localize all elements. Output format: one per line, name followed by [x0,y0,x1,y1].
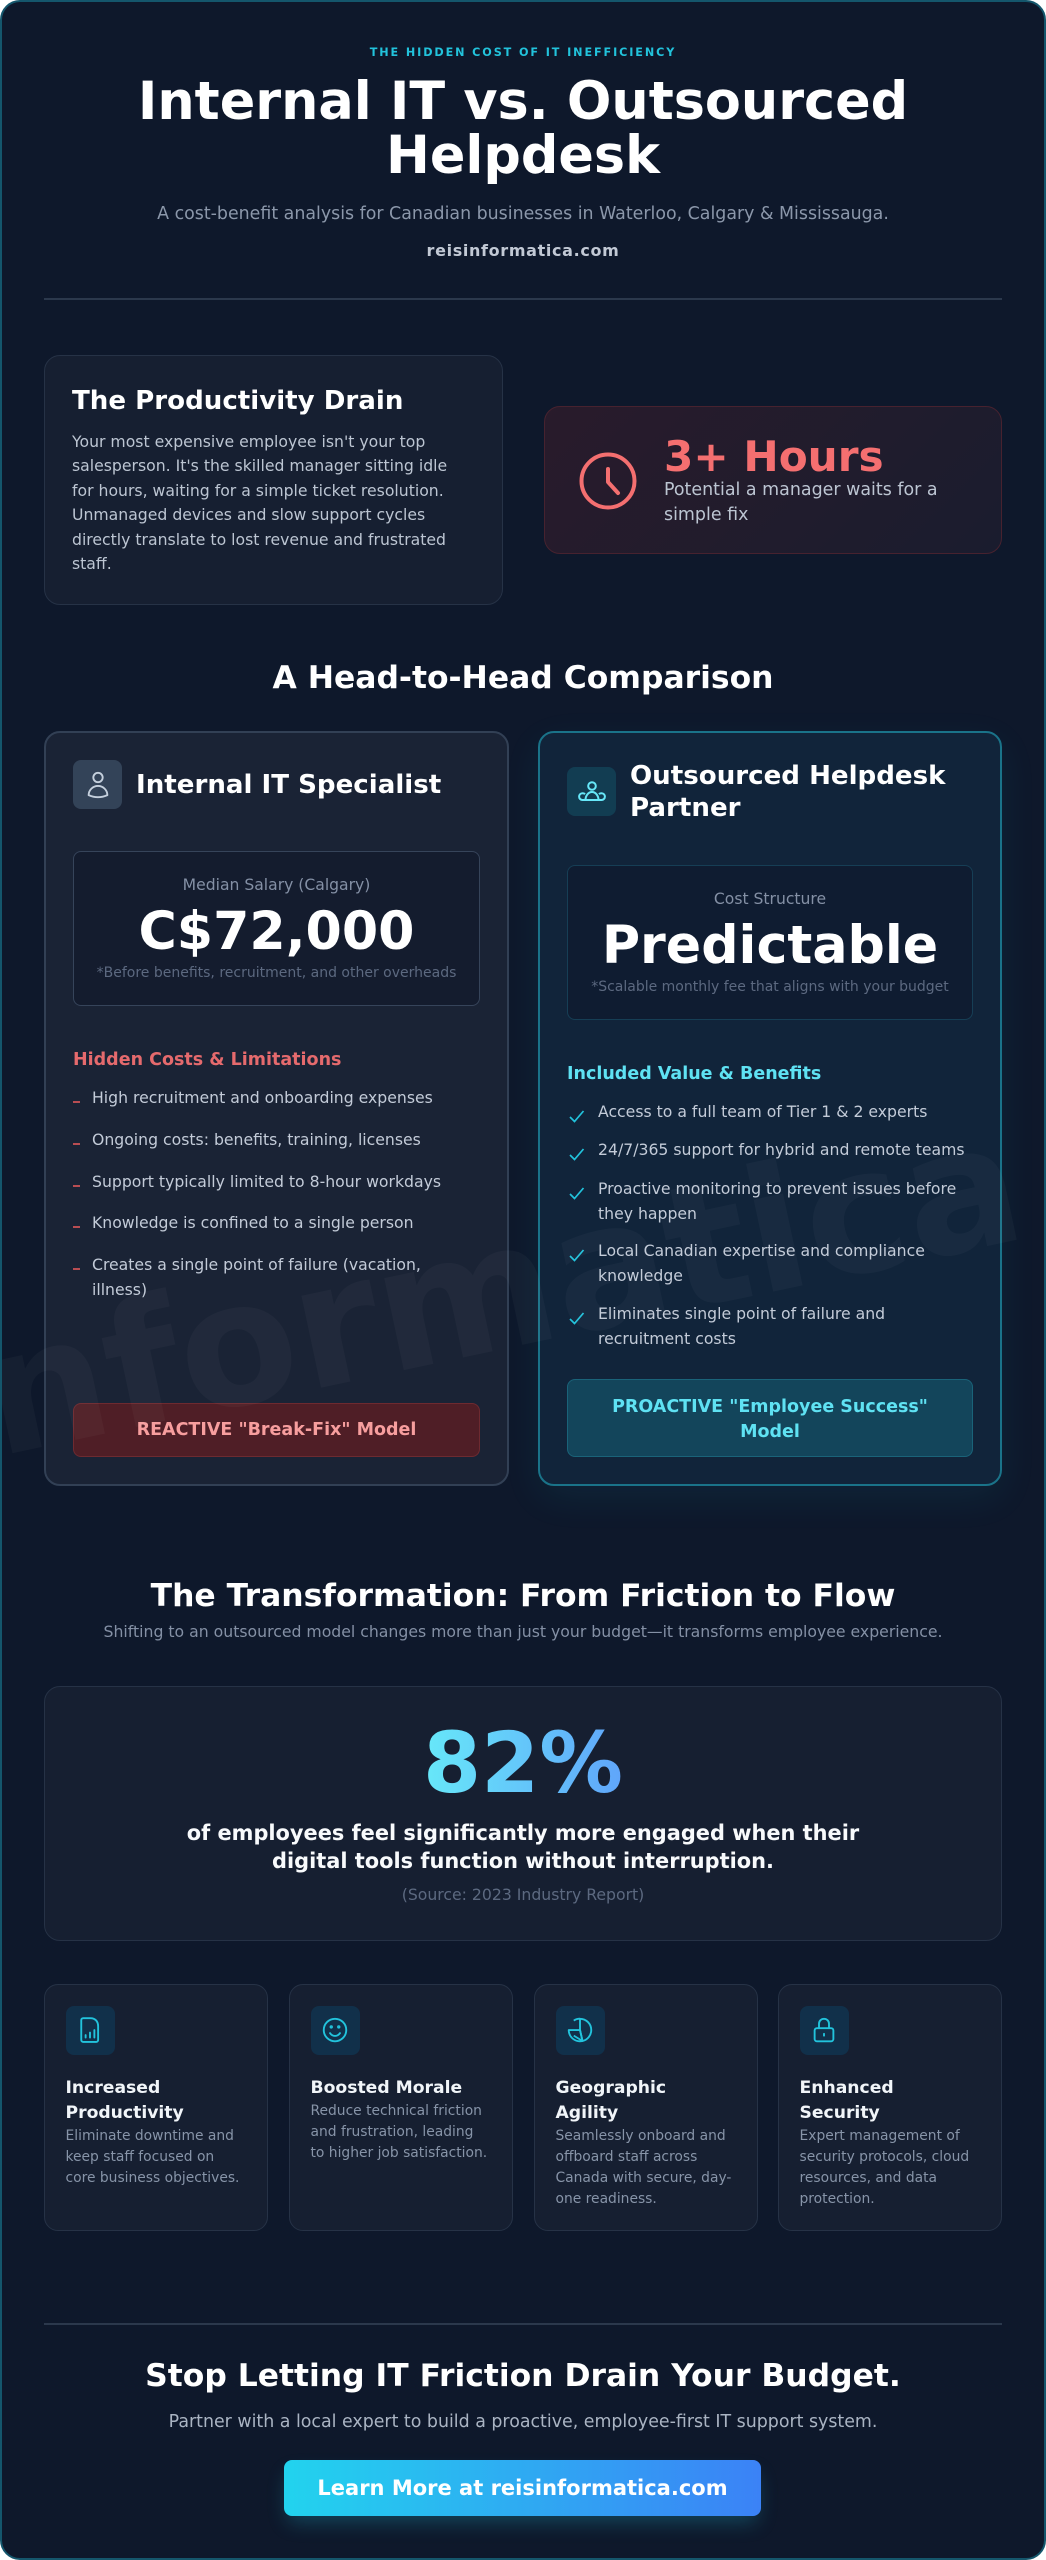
card title: Partner [630,793,741,823]
card text: Reduce technical friction [310,2103,482,2119]
card text: security protocols, cloud [800,2149,969,2165]
card text: one readiness. [556,2191,657,2207]
list: hidden costs: Ongoing costs: benefits, training, licenses [92,1130,421,1149]
panel: 82% stat [44,1686,1002,1941]
salary value: C$72,000 [138,902,414,962]
badge: proactive: PROACTIVE "Employee Success" [612,1397,928,1417]
card text [310,2103,487,2161]
title: Helpdesk [386,124,660,186]
body text: Your most expensive employee isn't your top [72,432,425,451]
card text: resources, and data [800,2170,937,2186]
section heading: transformation: The Transformation: From Friction to Flow [151,1578,895,1614]
list heading: Included Value & Benefits [567,1064,821,1084]
card title [800,2078,894,2122]
card title: Boosted Morale [310,2078,462,2098]
list: benefits [570,1102,965,1348]
cta button: Learn More at reisinformatica.com [317,2476,728,2500]
badge: proactive: Model [740,1422,800,1442]
stat statement: of employees feel significantly more engaged when their [187,1821,859,1845]
icon: globe segments [556,2006,604,2054]
panel: internal IT specialist [44,731,509,1486]
card title: Productivity [66,2102,184,2122]
stat caption: Potential a manager waits for a [664,480,938,500]
card text [66,2128,239,2186]
list: hidden costs: Support typically limited to 8-hour workdays [92,1172,441,1191]
card title [630,761,946,823]
panel: outsourced helpdesk partner [538,731,1002,1486]
body text [72,432,447,573]
card text: Eliminate downtime and [66,2128,234,2144]
card title: Security [800,2102,880,2122]
icon: document chart [66,2006,114,2054]
card title: Outsourced Helpdesk [630,761,945,791]
salary box [73,851,480,1006]
badge: reactive [73,1403,480,1457]
panel: geographic agility [534,1984,758,2231]
badge: reactive: REACTIVE "Break-Fix" Model [137,1420,416,1440]
website: reisinformatica.com [427,241,619,260]
subtitle: A cost-benefit analysis for Canadian businesses in Waterloo, Calgary & Mississauga. [157,204,889,224]
body text: Unmanaged devices and slow support cycles [72,505,425,524]
card text [800,2128,969,2207]
list: benefits: knowledge [598,1266,683,1284]
salary label: Median Salary (Calgary) [183,876,370,894]
panel: 3+ hours stat [544,406,1002,554]
list: benefits: Eliminates single point of failure and [598,1304,885,1323]
panel: boosted morale [289,1984,513,2231]
list: hidden costs: High recruitment and onboarding expenses [92,1088,433,1107]
card text: keep staff focused on [66,2149,214,2165]
source: (Source: 2023 Industry Report) [402,1885,644,1904]
cost note: *Scalable monthly fee that aligns with your budget [591,979,949,995]
card text: Seamlessly onboard and [556,2128,726,2144]
card title [66,2078,184,2122]
icon: team [567,767,616,816]
card title: Geographic [556,2078,666,2098]
icon: smile [310,2006,360,2054]
stat value: 82% [423,1714,623,1812]
panel: enhanced security [778,1984,1002,2231]
card title: Increased [66,2078,160,2098]
panel: productivity drain [44,355,503,605]
body text: salesperson. It's the skilled manager sitting idle [72,456,447,475]
list: benefits: Access to a full team of Tier 1 & 2 experts [598,1102,927,1121]
section subheading: Shifting to an outsourced model changes more than just your budget—it transforms employee experience. [104,1622,942,1641]
card text: and frustration, leading [310,2124,473,2140]
list heading: Hidden Costs & Limitations [73,1050,341,1070]
icon: person [73,760,122,809]
list: benefits: recruitment costs [598,1328,736,1348]
body text: for hours, waiting for a simple ticket resolution. [72,481,444,500]
cost value: Predictable [602,916,938,976]
card text: Canada with secure, day- [556,2170,731,2186]
card text: Expert management of [800,2128,960,2144]
icon: lock [800,2006,848,2054]
stat statement [187,1821,860,1873]
section heading: comparison: A Head-to-Head Comparison [272,660,774,696]
list: hidden costs: Knowledge is confined to a single person [92,1213,414,1232]
list: benefits: Proactive monitoring to prevent issues before [598,1179,956,1198]
cost label: Cost Structure [714,890,826,908]
card title: Internal IT Specialist [136,770,441,800]
card title: Agility [556,2102,618,2122]
list: hidden costs: Creates a single point of failure (vacation, [92,1255,421,1274]
footer call to action [145,2358,901,2531]
stat caption: simple fix [664,504,748,524]
heading: The Productivity Drain [72,386,403,416]
stat value [45,1715,1001,1811]
icon: clock [580,452,636,510]
list: benefits: they happen [598,1204,697,1222]
list: hidden costs [73,1088,441,1298]
card text: core business objectives. [66,2170,239,2186]
list: hidden costs: illness) [92,1280,147,1298]
card title: Enhanced [800,2078,894,2098]
body text: staff. [72,554,112,573]
eyebrow: THE HIDDEN COST OF IT INEFFICIENCY [370,46,676,59]
cta heading: Stop Letting IT Friction Drain Your Budget. [145,2358,901,2394]
salary note: *Before benefits, recruitment, and other overheads [97,965,456,981]
card text: offboard staff across [556,2149,697,2165]
title: Internal IT vs. Outsourced [138,71,908,132]
body text: directly translate to lost revenue and frustrated [72,530,446,549]
cost box [567,865,973,1020]
card text: protection. [800,2191,875,2207]
card text: to higher job satisfaction. [310,2145,487,2161]
card title [556,2078,666,2122]
stat value: 3+ Hours [664,432,884,481]
cta button [284,2460,761,2516]
stat caption [664,480,938,524]
list: benefits: Local Canadian expertise and compliance [598,1241,925,1260]
panel: increased productivity [44,1984,268,2231]
title [138,71,908,186]
header [138,46,908,260]
cta text: Partner with a local expert to build a proactive, employee-first IT support system. [169,2412,877,2432]
stat statement: digital tools function without interruption. [272,1849,774,1873]
list: benefits: 24/7/365 support for hybrid and remote teams [598,1140,965,1159]
badge: proactive [567,1379,973,1457]
card text [556,2128,731,2207]
